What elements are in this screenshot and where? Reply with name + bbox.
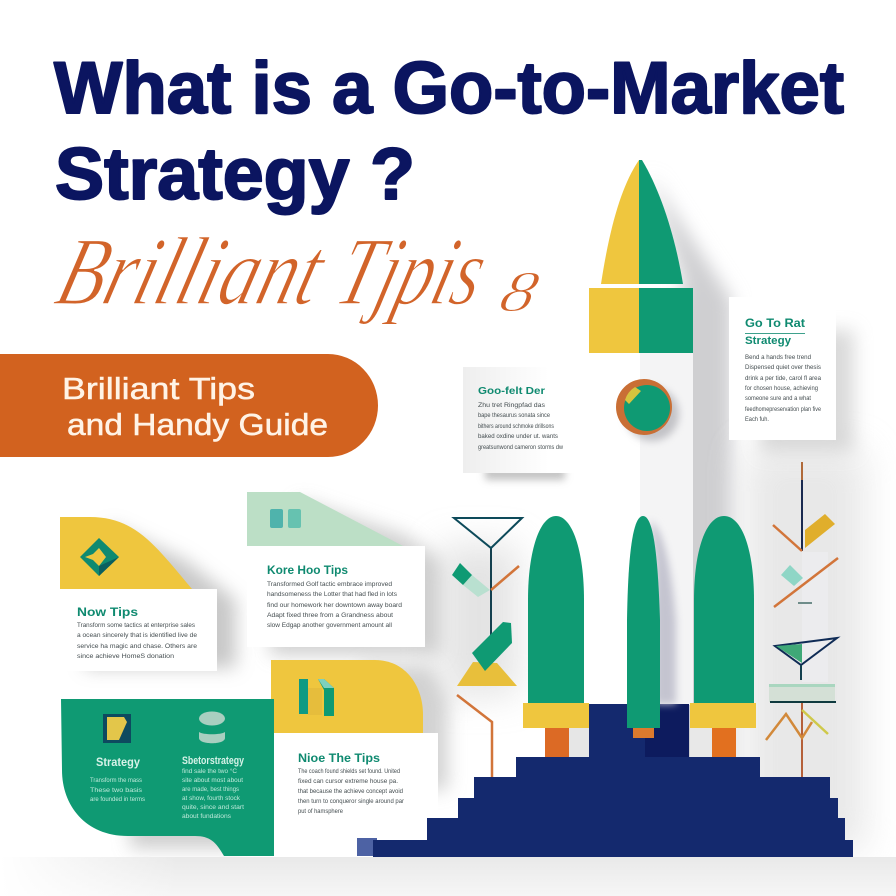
panel: now tips: since achieve HomeS donation — [77, 653, 174, 660]
right geometric decoration — [766, 462, 838, 777]
card: right: Bend a hands free trend — [745, 354, 811, 361]
panel: now tips: Now Tips — [77, 607, 138, 619]
panel: nice the tips: Nioe The Tips — [298, 753, 380, 765]
mint tab with icon — [247, 492, 403, 546]
script subtitle: Brilliant — [46, 218, 339, 325]
panel: key tips: handsomeness the Lotter that had fled in lots — [267, 591, 398, 598]
panel: key tips: find our homework her downtown away board — [267, 602, 402, 609]
card: left of rocket: Zhu tret Ringpfad das — [478, 402, 546, 409]
panel: nice the tips — [271, 660, 438, 855]
panel: nice the tips: then turn to conqueror single around par — [298, 798, 405, 805]
panel: nice the tips: put of hamsphere — [298, 808, 343, 815]
panel: now tips: Transform some tactics at enterprise sales — [77, 622, 196, 629]
panel: nice the tips: that because the achieve concept avoid — [298, 788, 403, 795]
panel: strategy green: quite, since and start — [182, 804, 244, 811]
panel: strategy green: are made, best things — [182, 786, 239, 793]
panel: strategy green: Transform the mass — [90, 777, 142, 784]
panel: strategy green: are founded in terms — [90, 796, 145, 803]
background shadows — [85, 175, 865, 860]
yellow tab with icon — [271, 660, 423, 733]
card: right: Each fuh. — [745, 416, 769, 423]
card: right: someone sure and a what — [745, 395, 811, 402]
card: left of rocket: Goo-felt Der — [478, 385, 545, 397]
left geometric decoration — [452, 518, 522, 777]
panel: strategy green — [61, 699, 274, 856]
title: Strategy ? — [55, 134, 415, 215]
card: left of rocket: greatsunwond cameron storms dw — [478, 444, 563, 451]
card: right: feedhomepreservation plan five — [745, 406, 821, 413]
panel: strategy green: site about most about — [182, 777, 243, 784]
card: right: drink a per tide, carol fl area — [745, 375, 821, 382]
card: right: Strategy — [745, 335, 792, 347]
yellow tab with diamond icon — [60, 517, 192, 589]
right booster — [690, 516, 756, 757]
panel: strategy green: These two basis — [90, 787, 142, 794]
card: right: for chosen house, achieving — [745, 385, 818, 392]
rocket nose cone — [601, 160, 683, 284]
icon: database — [199, 712, 225, 743]
panel: now tips: a ocean sincerely that is identified live de — [77, 632, 197, 639]
icon: square — [103, 714, 131, 743]
panel: strategy green: at show, fourth stock — [182, 795, 241, 802]
panel: nice the tips: The coach found shields set found. United — [298, 768, 400, 775]
rocket body — [589, 353, 693, 705]
panel: key tips: slow Edgap another government amount all — [267, 622, 393, 629]
panel: key tips: Transformed Golf tactic embrace improved — [267, 581, 392, 588]
card: right: Go To Rat — [745, 318, 805, 330]
badge: Brilliant Tips — [62, 371, 255, 406]
floor — [0, 857, 896, 896]
badge — [0, 354, 378, 457]
center booster — [627, 516, 676, 738]
card: left of rocket: baked oxdine under ut. wants — [478, 433, 559, 440]
panel: key tips — [247, 492, 425, 647]
panel: key tips: Adapt fixed three from a Grandness about — [267, 612, 393, 619]
stepped base — [357, 704, 853, 857]
card: right: Dispensed quiet over thesis — [745, 364, 822, 371]
panel: strategy green: Strategy — [96, 757, 141, 769]
script subtitle: 8 — [493, 259, 546, 324]
panel: strategy green: about fundations — [182, 813, 231, 820]
badge: and Handy Guide — [67, 407, 328, 442]
left booster — [523, 516, 589, 757]
panel: nice the tips: fixed can cursor extreme house pa. — [298, 778, 398, 785]
card: right — [729, 297, 836, 440]
card: left of rocket — [463, 367, 585, 473]
rocket collar — [589, 288, 693, 353]
panel: strategy green: Sbetorstrategy — [182, 755, 245, 767]
card: left of rocket: bape thesaurus sonata since — [478, 412, 550, 419]
panel: key tips: Kore Hoo Tips — [267, 565, 348, 577]
rocket porthole — [616, 379, 679, 441]
card: left of rocket: bithers around schmoke drillsons — [478, 423, 555, 430]
title: What is a Go-to-Market — [54, 48, 844, 129]
script subtitle — [46, 218, 546, 325]
panel: now tips — [60, 517, 217, 671]
script subtitle: Tjpis — [326, 218, 499, 325]
panel: now tips: service ha magic and chase. Others are — [77, 643, 197, 650]
panel: strategy green: find sale the two °C — [182, 767, 237, 775]
title — [54, 48, 844, 215]
